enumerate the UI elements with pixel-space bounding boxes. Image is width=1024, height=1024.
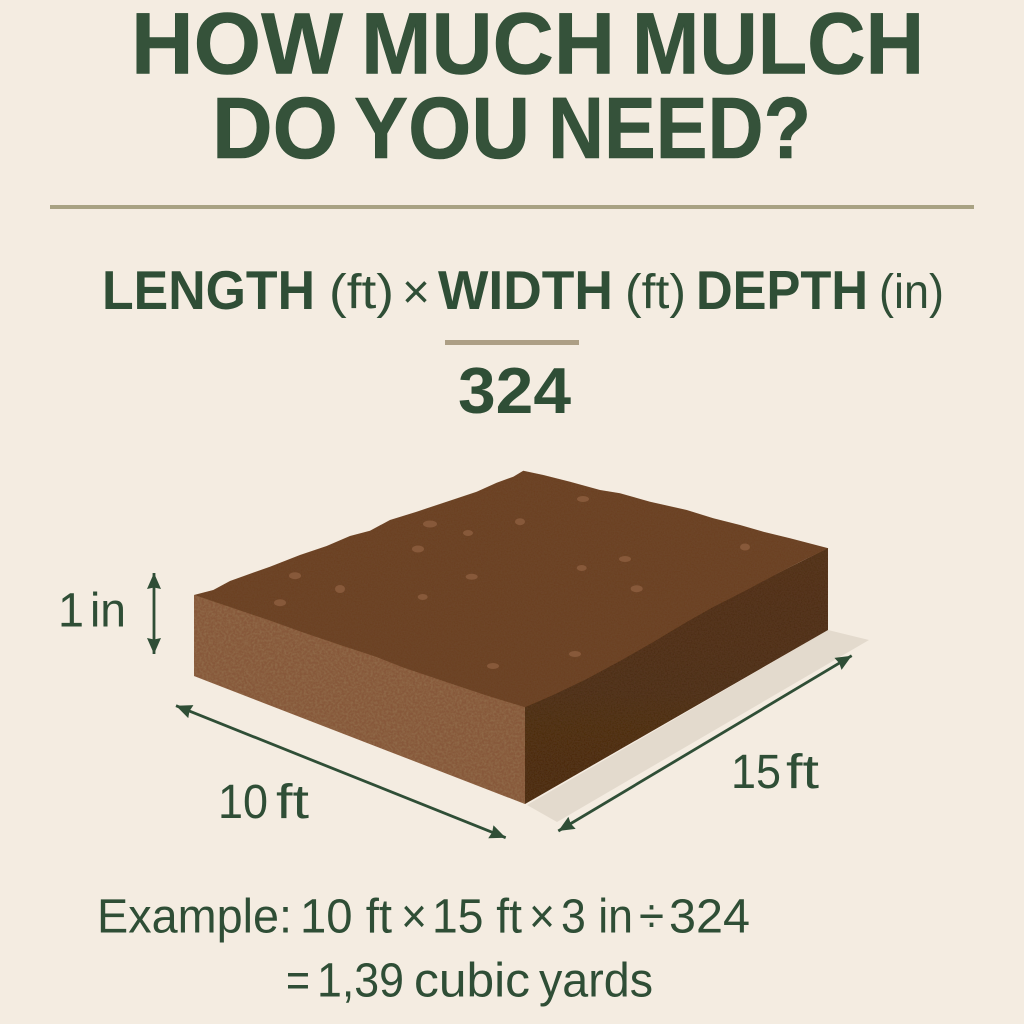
formula numerator: DEPTH <box>696 259 868 321</box>
formula fraction bar <box>445 340 579 345</box>
label: depth <box>58 585 126 638</box>
top face <box>194 471 828 707</box>
example line 1: 3 in <box>561 891 633 944</box>
mulch bed diagram <box>194 471 869 822</box>
formula numerator: (in) <box>879 266 944 319</box>
example line 2: yards <box>539 955 653 1008</box>
title: DO <box>212 80 338 177</box>
mulch specks <box>274 496 750 669</box>
label: width: 15 <box>731 746 781 799</box>
title: YOU <box>354 80 530 177</box>
formula numerator: LENGTH <box>102 259 315 321</box>
label: depth: 1 <box>58 585 84 638</box>
title <box>131 0 924 177</box>
formula numerator: (ft) <box>329 266 394 319</box>
label: width: ft <box>786 746 819 799</box>
formula numerator: × <box>402 266 430 319</box>
arrow: length <box>176 706 506 838</box>
formula numerator: WIDTH <box>438 259 613 321</box>
example line 2: = <box>286 955 310 1008</box>
ground shadow <box>527 630 869 822</box>
example line 1: ÷ <box>639 891 664 944</box>
formula numerator: (ft) <box>625 266 686 319</box>
label: length: ft <box>276 776 309 829</box>
example line 1: 15 ft <box>432 891 522 944</box>
arrow: depth <box>153 573 155 654</box>
example line 1: 324 <box>669 891 750 944</box>
title: NEED? <box>548 80 811 177</box>
front left face <box>194 595 525 804</box>
example line 1: 10 ft <box>300 891 392 944</box>
example line 2: cubic <box>414 955 530 1008</box>
front right face <box>525 548 828 804</box>
title divider <box>50 205 974 209</box>
example line 1 <box>97 891 750 944</box>
label: depth: in <box>90 585 126 638</box>
example line 1: Example: <box>97 891 292 944</box>
example line 2 <box>286 955 653 1008</box>
label: width <box>731 746 819 799</box>
label: length <box>218 776 309 829</box>
example line 1: × <box>401 891 427 944</box>
formula denominator: 324 <box>458 354 571 427</box>
label: length: 10 <box>218 776 268 829</box>
example line 2: 1,39 <box>317 955 404 1008</box>
arrow: width <box>558 656 852 831</box>
example line 1: × <box>529 891 555 944</box>
formula numerator <box>102 259 944 321</box>
